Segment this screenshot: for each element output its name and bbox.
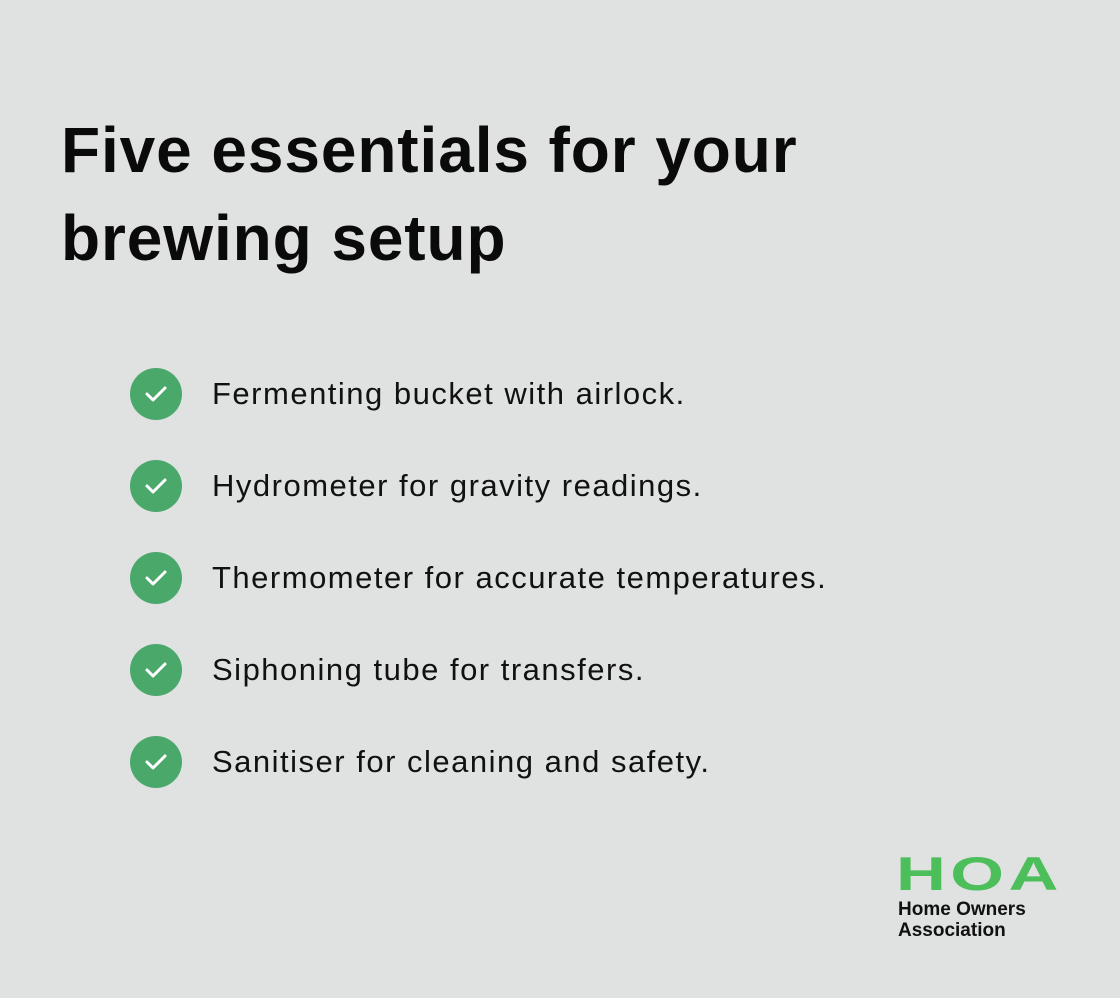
- title: Five essentials for your: [61, 114, 798, 186]
- item 5: Sanitiser for cleaning and safety.: [212, 744, 710, 779]
- logo: HOA: HOA: [896, 847, 1063, 900]
- item 1: [130, 368, 686, 420]
- item 3: Thermometer for accurate temperatures.: [212, 560, 827, 595]
- checklist: [130, 368, 827, 788]
- item 4: [130, 644, 645, 696]
- item 5: [130, 736, 710, 788]
- title: [61, 114, 798, 274]
- item 1: Fermenting bucket with airlock.: [212, 376, 686, 411]
- logo: HOA: [896, 847, 1063, 941]
- item 2: [130, 460, 703, 512]
- logo: HOA: Home Owners: [898, 899, 1026, 920]
- item 2: Hydrometer for gravity readings.: [212, 468, 703, 503]
- title: brewing setup: [61, 202, 507, 274]
- item 4: Siphoning tube for transfers.: [212, 652, 645, 687]
- item 3: [130, 552, 827, 604]
- logo: HOA: Association: [898, 920, 1006, 941]
